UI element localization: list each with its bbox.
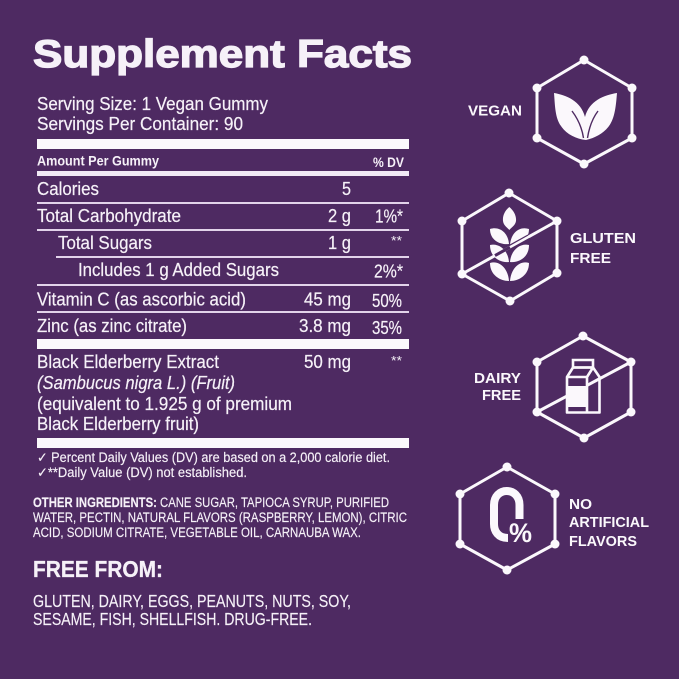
row: black elderberry extract: ** (391, 353, 402, 368)
other ingredients (33, 495, 407, 540)
free from list (33, 591, 351, 629)
row: zinc (37, 316, 402, 338)
table header: % DV (373, 154, 405, 170)
icon: gluten free hexagon with wheat (458, 188, 562, 306)
row: total carbohydrate: 1%* (375, 206, 403, 226)
row: total carbohydrate: Total Carbohydrate (37, 206, 181, 226)
row: zinc: Zinc (as zinc citrate) (37, 316, 187, 336)
row: calories: Calories (37, 179, 99, 199)
free from list: SESAME, FISH, SHELLFISH. DRUG-FREE. (33, 609, 312, 629)
row: vitamin c (37, 290, 402, 311)
icon: hexagon with zero percent: % (509, 518, 532, 548)
row: added sugars: Includes 1 g Added Sugars (78, 260, 279, 280)
no artificial flavors label: FLAVORS (569, 534, 637, 550)
row: total sugars: Total Sugars (58, 233, 152, 253)
other ingredients: WATER, PECTIN, NATURAL FLAVORS (RASPBERRY, LEMON), CITRIC (33, 510, 407, 525)
table header (37, 152, 405, 170)
no artificial flavors label (569, 497, 649, 550)
row: vitamin c: 50% (372, 291, 402, 311)
row: vitamin c: 45 mg (304, 290, 351, 310)
gluten free label: FREE (570, 251, 611, 267)
gluten free badge (458, 188, 636, 306)
row: vitamin c: Vitamin C (as ascorbic acid) (37, 290, 246, 310)
no artificial flavors badge (456, 462, 649, 574)
row: total sugars: 1 g (328, 233, 351, 253)
row: black elderberry extract: Black Elderberry fruit) (37, 414, 199, 434)
no artificial flavors label: ARTIFICIAL (569, 515, 649, 531)
dairy free label: FREE (482, 388, 521, 404)
other ingredients: ACID, SODIUM CITRATE, VEGETABLE OIL, CARNAUBA WAX. (33, 525, 361, 540)
row: calories (37, 179, 351, 199)
row: added sugars: 2%* (374, 262, 403, 282)
title: Supplement Facts (33, 33, 412, 76)
row: calories: 5 (342, 179, 351, 199)
vegan label: VEGAN (468, 104, 522, 120)
row: total carbohydrate: 2 g (328, 206, 351, 226)
no artificial flavors label: NO (569, 497, 592, 513)
other ingredients: OTHER INGREDIENTS: CANE SUGAR, TAPIOCA SYRUP, PURIFIED (33, 495, 389, 510)
row: total carbohydrate (37, 206, 403, 226)
footnotes: ✓ Percent Daily Values (DV) are based on a 2,000 calorie diet. (37, 450, 390, 465)
free from heading: FREE FROM: (33, 556, 163, 582)
row: zinc: 3.8 mg (299, 316, 351, 336)
dairy free badge (474, 332, 636, 442)
row: black elderberry extract: (equivalent to 1.925 g of premium (37, 394, 292, 414)
free from list: GLUTEN, DAIRY, EGGS, PEANUTS, NUTS, SOY, (33, 591, 351, 611)
footnotes: ✓**Daily Value (DV) not established. (37, 465, 247, 480)
serving information: Serving Size: 1 Vegan Gummy (37, 94, 268, 114)
row: black elderberry extract: Black Elderberry Extract (37, 352, 219, 372)
row: black elderberry extract: 50 mg (304, 352, 351, 372)
row: black elderberry extract: (Sambucus nigra L.) (Fruit) (37, 373, 235, 393)
panel: supplement facts table (37, 139, 409, 448)
serving information: Servings Per Container: 90 (37, 114, 243, 134)
gluten free label: GLUTEN (570, 231, 636, 247)
row: total sugars (58, 233, 402, 253)
dairy free label: DAIRY (474, 371, 521, 387)
row: total sugars: ** (391, 233, 402, 248)
icon: hexagon with zero percent (456, 462, 560, 574)
icon: vegan hexagon with leaves (532, 56, 636, 168)
footnotes (37, 450, 390, 480)
table header: Amount Per Gummy (37, 152, 159, 168)
row: black elderberry extract (37, 352, 402, 434)
gluten free label (570, 231, 636, 267)
row: added sugars (78, 260, 403, 282)
vegan badge (468, 56, 636, 168)
icon: dairy free hexagon with milk carton (532, 332, 636, 442)
row: zinc: 35% (372, 318, 402, 338)
dairy free label (474, 371, 521, 404)
serving information (37, 94, 268, 134)
